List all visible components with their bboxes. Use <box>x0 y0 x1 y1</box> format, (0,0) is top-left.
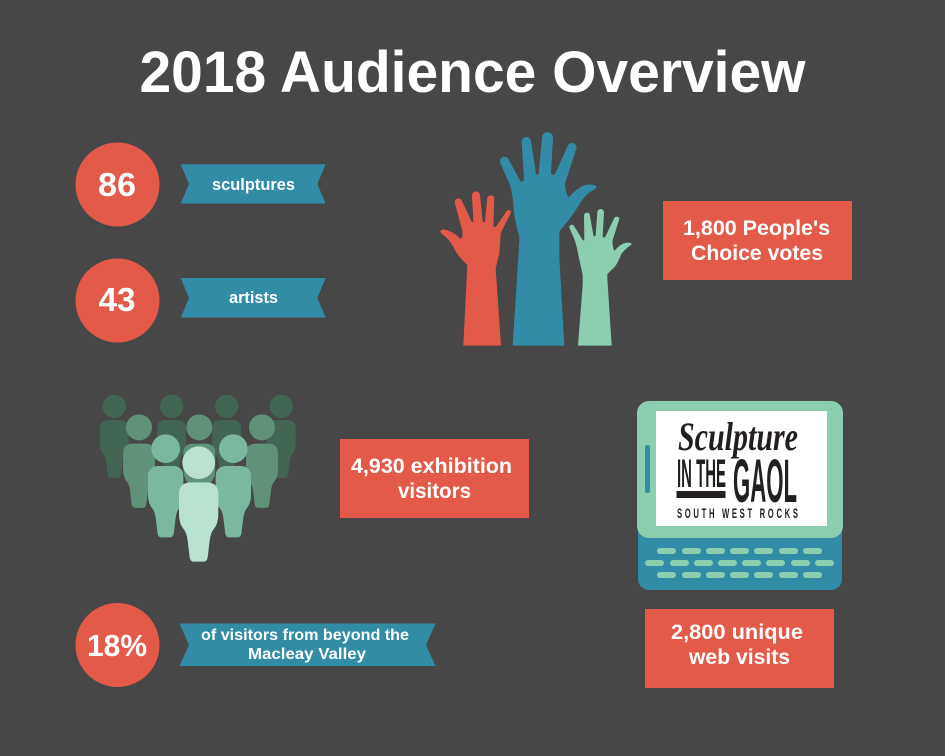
stat: 86 sculptures: 86 <box>98 166 136 203</box>
callout: People's Choice votes <box>663 201 852 280</box>
icon: tablet with logo: Sculpture <box>678 414 798 459</box>
stat: 18% of visitors: Macleay Valley <box>248 646 366 663</box>
stat: 86 sculptures: sculptures <box>212 176 295 194</box>
callout: unique web visits: 2,800 unique <box>671 620 803 644</box>
stat: 86 sculptures <box>76 142 326 226</box>
icon: red hand <box>440 191 511 346</box>
stat: 18% of visitors: of visitors from beyond the <box>201 627 409 644</box>
callout: unique web visits <box>645 609 834 688</box>
callout: unique web visits: web visits <box>688 645 790 669</box>
callout: exhibition visitors: 4,930 exhibition <box>351 454 512 478</box>
icon: tablet with logo <box>637 401 843 590</box>
stat: 43 artists: 43 <box>98 281 136 318</box>
icon: tablet with logo: IN THE <box>677 452 726 496</box>
stat: 43 artists <box>76 258 326 342</box>
icon: tablet with logo: GAOL <box>733 447 797 515</box>
callout: People's Choice votes: Choice votes <box>691 242 823 265</box>
icon: blue hand <box>500 132 597 346</box>
icon: tablet with logo: SOUTH WEST ROCKS <box>677 507 798 522</box>
stat: 18% of visitors: 18% <box>87 628 147 663</box>
icon: raised hands <box>440 132 632 346</box>
icon: green hand <box>569 209 632 346</box>
icon: crowd of people <box>100 395 296 562</box>
title: 2018 Audience Overview <box>140 40 806 105</box>
callout: exhibition visitors: visitors <box>398 479 471 503</box>
callout: People's Choice votes: 1,800 People's <box>683 217 830 240</box>
stat: 43 artists: artists <box>229 289 278 307</box>
stat: 18% of visitors <box>76 603 436 687</box>
callout: exhibition visitors <box>340 439 529 518</box>
